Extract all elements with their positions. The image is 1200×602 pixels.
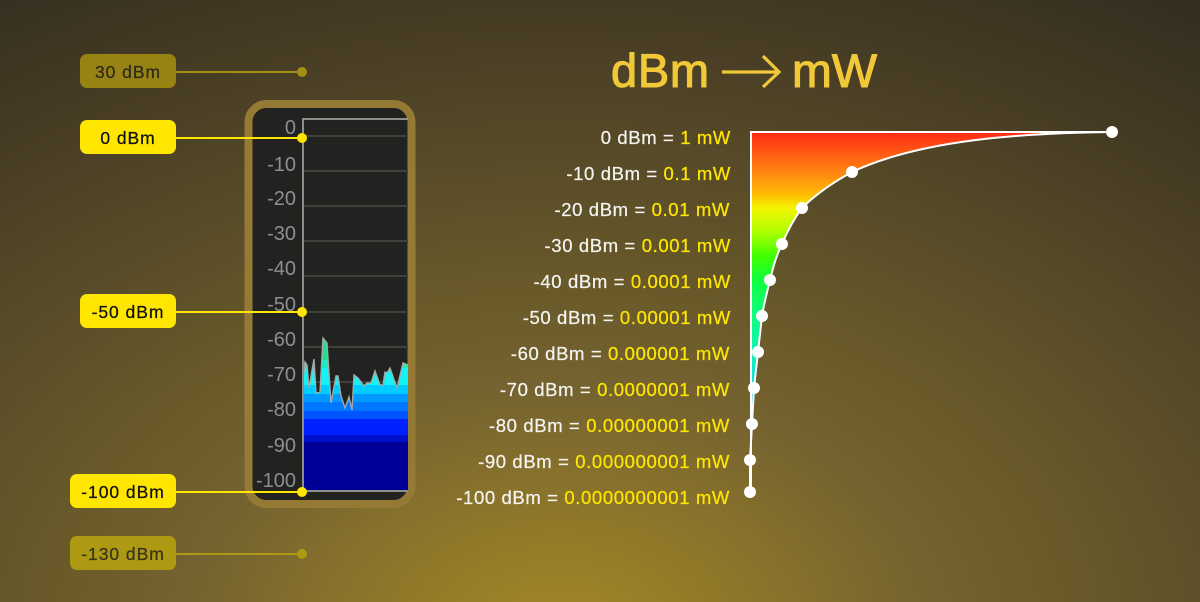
spectrum trace (303, 330, 408, 491)
panel frame (248, 104, 412, 504)
label: -130 dBm (70, 536, 307, 570)
data points (744, 126, 1118, 498)
label: 0 dBm: 0 dBm (100, 128, 156, 148)
grid lines (303, 136, 408, 382)
label: 30 dBm: 30 dBm (95, 62, 161, 82)
label: -100 dBm (70, 474, 307, 508)
conversion list: -50 dBm = 0.00001 mW (523, 307, 731, 328)
label: -130 dBm: -130 dBm (81, 544, 165, 564)
conversion list: -20 dBm = 0.01 mW (554, 199, 730, 220)
conversion list: -10 dBm = 0.1 mW (566, 163, 731, 184)
label: -50 dBm: -50 dBm (92, 302, 164, 322)
axis labels: -10 (267, 154, 296, 176)
conversion list: -30 dBm = 0.001 mW (545, 235, 731, 256)
spectrum analyzer panel (248, 104, 412, 504)
conversion list (456, 127, 731, 508)
title: dBm (611, 44, 709, 97)
axis labels: -40 (267, 258, 296, 280)
curve line and axes (750, 132, 1112, 492)
title (611, 44, 878, 97)
conversion list: -70 dBm = 0.0000001 mW (500, 379, 730, 400)
icon: arrow (722, 56, 779, 87)
title: mW (792, 44, 878, 97)
axis labels: -80 (267, 399, 296, 421)
axis labels: -60 (267, 329, 296, 351)
label: -100 dBm: -100 dBm (81, 482, 165, 502)
label: 30 dBm (80, 54, 307, 88)
gradient fill (751, 132, 1112, 424)
axis labels: -20 (267, 188, 296, 210)
axis labels: 0 (285, 117, 296, 139)
conversion list: -60 dBm = 0.000001 mW (511, 343, 730, 364)
axis labels: -50 (267, 294, 296, 316)
axis labels: -90 (267, 435, 296, 457)
conversion list: -40 dBm = 0.0001 mW (534, 271, 731, 292)
axis labels: -100 (256, 470, 296, 492)
axes (303, 119, 408, 491)
conversion list: -80 dBm = 0.00000001 mW (489, 415, 730, 436)
conversion list: -90 dBm = 0.000000001 mW (478, 451, 730, 472)
conversion list: 0 dBm = 1 mW (601, 127, 731, 148)
axis labels: -70 (267, 364, 296, 386)
label: 0 dBm (80, 120, 307, 154)
axis labels: -30 (267, 223, 296, 245)
conversion list: -100 dBm = 0.0000000001 mW (456, 487, 730, 508)
axis labels (256, 117, 296, 492)
curve chart (744, 126, 1118, 498)
label: -50 dBm (80, 294, 307, 328)
